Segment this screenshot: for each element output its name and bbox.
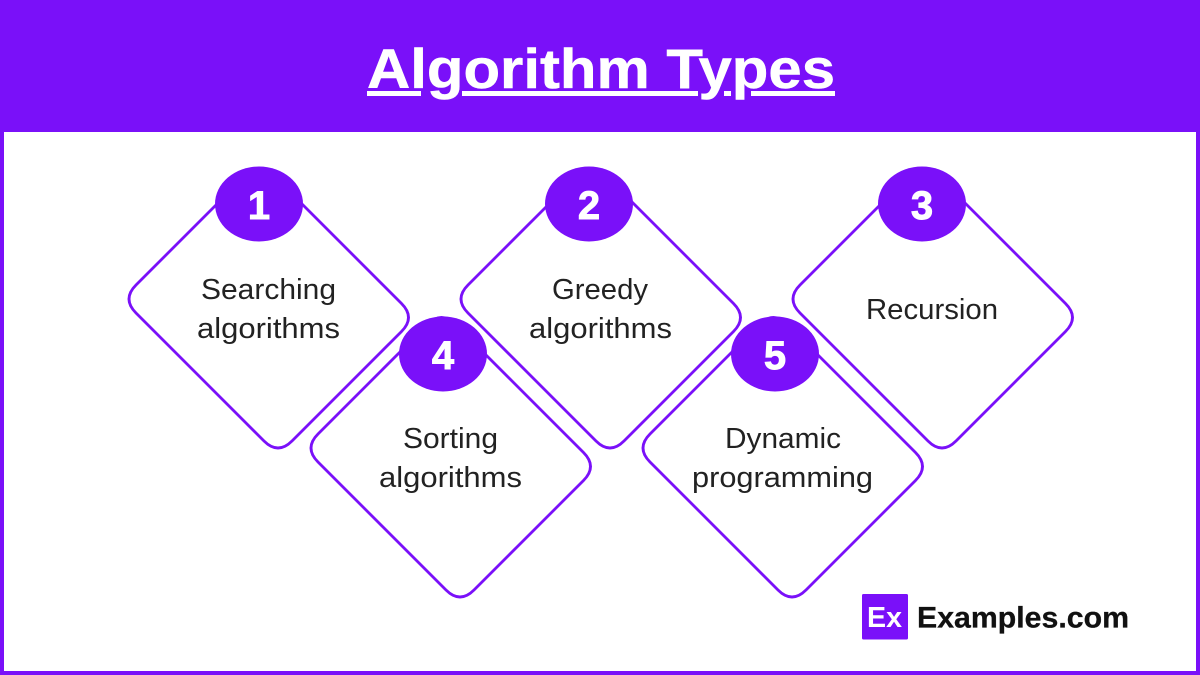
badge 3 (878, 166, 966, 242)
badge 3: 3 (911, 184, 933, 228)
label: searching algorithms: Searching (201, 274, 336, 306)
label: searching algorithms: algorithms (197, 313, 340, 345)
label: dynamic programming (692, 423, 873, 494)
label: dynamic programming: programming (692, 462, 873, 494)
logo mark: Ex (867, 602, 902, 634)
badge 5: 5 (764, 334, 786, 378)
badge 4 (399, 316, 487, 392)
label: dynamic programming: Dynamic (725, 423, 841, 455)
title: Algorithm Types (367, 37, 835, 100)
badge 4: 4 (432, 334, 455, 378)
badge 1: 1 (248, 184, 270, 228)
panel: 5 dynamic programming (643, 316, 922, 597)
logo wordmark: Examples.com (917, 602, 1129, 634)
panel: 4 sorting algorithms (311, 316, 590, 597)
label: sorting algorithms: Sorting (403, 423, 498, 455)
badge 1 (215, 166, 303, 242)
panel: 3 recursion (793, 166, 1072, 448)
label: sorting algorithms: algorithms (379, 462, 522, 494)
label: greedy algorithms: algorithms (529, 313, 672, 345)
badge 2 (545, 166, 633, 242)
label: searching algorithms (197, 274, 340, 345)
header band (0, 0, 1200, 132)
label: sorting algorithms (379, 423, 522, 494)
badge 2: 2 (578, 184, 600, 228)
label: greedy algorithms: Greedy (552, 274, 648, 306)
logo: Examples.com (862, 594, 1129, 640)
panel: 2 greedy algorithms (461, 166, 740, 448)
badge 5 (731, 316, 819, 392)
label: greedy algorithms (529, 274, 672, 345)
label: recursion: Recursion (866, 294, 998, 326)
logo mark (862, 594, 908, 640)
panel: 1 searching algorithms (129, 166, 408, 448)
